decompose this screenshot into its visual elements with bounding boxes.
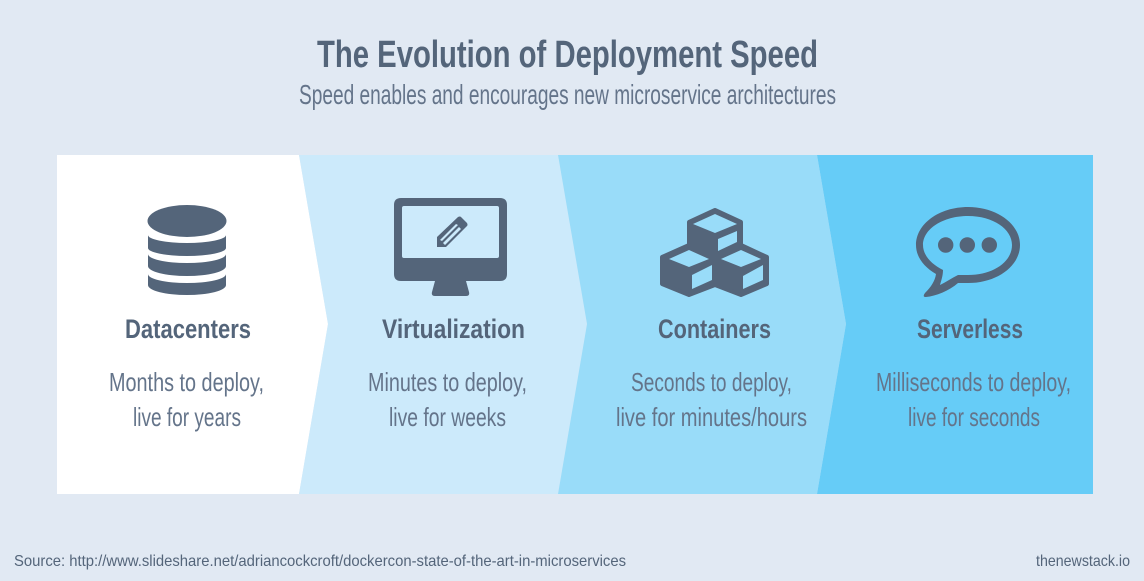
text: datacenters description: live for years [133, 402, 241, 432]
text: containers description [616, 367, 807, 432]
text: containers description: live for minutes/hours [616, 402, 807, 432]
text: serverless description: Milliseconds to deploy, [876, 367, 1071, 397]
text: virtualization description: live for weeks [389, 402, 506, 432]
heading: containers: Containers [658, 314, 771, 344]
heading: virtualization: Virtualization [382, 314, 525, 344]
heading: datacenters: Datacenters [125, 314, 251, 344]
panel: datacenters [57, 155, 328, 494]
icon: speech bubble [916, 207, 1020, 297]
subtitle: Speed enables and encourages new microservice architectures [299, 79, 836, 110]
text: virtualization description [368, 367, 527, 432]
text: serverless description: live for seconds [908, 402, 1040, 432]
heading: serverless: Serverless [917, 314, 1023, 344]
icon: stacked cubes [662, 210, 767, 295]
text: datacenters description [109, 367, 264, 432]
panel: containers [558, 155, 846, 494]
text: datacenters description: Months to deploy, [109, 367, 264, 397]
brand credit: thenewstack.io [1036, 553, 1130, 570]
text: virtualization description: Minutes to deploy, [368, 367, 527, 397]
title: The Evolution of Deployment Speed [317, 34, 818, 76]
icon: database [148, 205, 226, 295]
text: containers description: Seconds to deploy, [631, 367, 792, 397]
source note: Source: http://www.slideshare.net/adriancockcroft/dockercon-state-of-the-art-in-microservices [14, 553, 626, 570]
panel: serverless [817, 155, 1093, 494]
panel: virtualization [299, 155, 587, 494]
text: serverless description [876, 367, 1071, 432]
icon: monitor with pencil [394, 198, 507, 296]
